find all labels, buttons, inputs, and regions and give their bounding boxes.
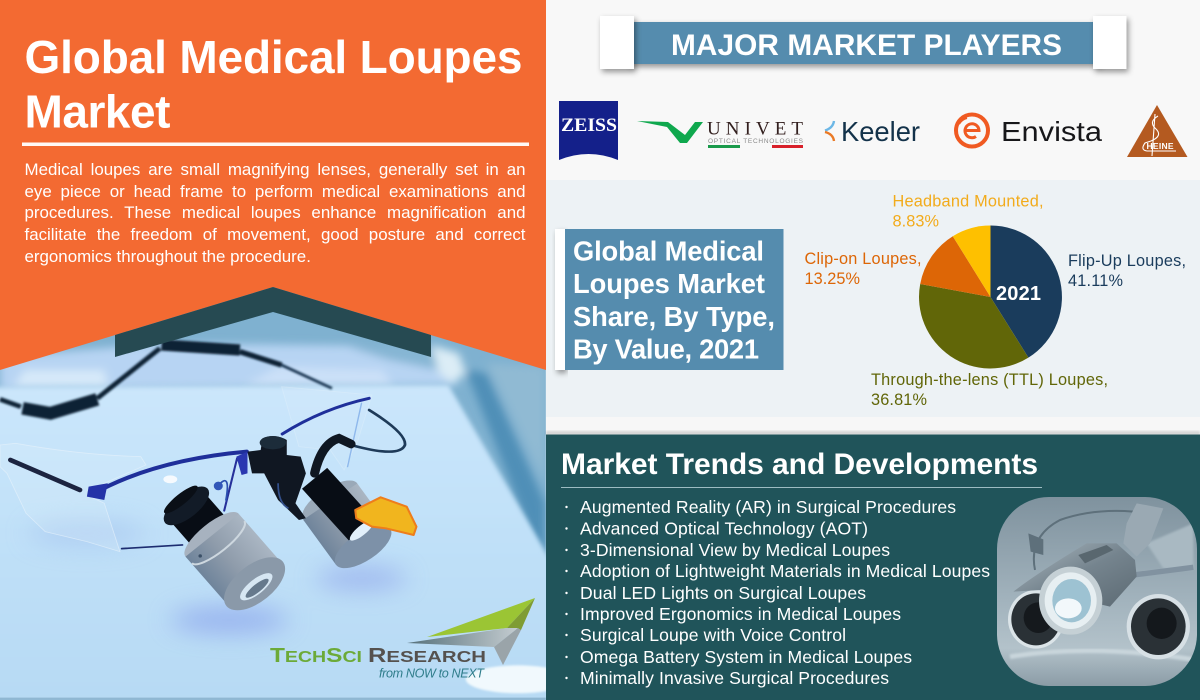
label: through-the-lens loupes: Through-the-lens (TTL) Loupes, xyxy=(871,371,1108,389)
list of trends: Advanced Optical Technology (AOT) xyxy=(580,518,868,538)
logo: Heine xyxy=(1127,105,1188,157)
heading: market trends and developments: Market Trends and Developments xyxy=(561,448,1038,481)
logo: Zeiss: ZEISS xyxy=(561,115,617,136)
logo: Envista: Envista xyxy=(1001,116,1102,147)
chevron: dark teal roof xyxy=(115,287,431,357)
title underline xyxy=(22,142,529,146)
logo: Envista xyxy=(956,114,1102,147)
logo: TechSci Research: from NOW to NEXT xyxy=(379,666,485,680)
panel: market share title block xyxy=(555,229,784,370)
logo: Univet: OPTICAL TECHNOLOGIES xyxy=(708,138,804,145)
label: headband mounted: Headband Mounted, xyxy=(892,192,1044,210)
title: Global Medical Loupes xyxy=(24,31,522,83)
blue frame xyxy=(10,398,405,549)
left loupe xyxy=(164,486,286,610)
title: Market xyxy=(24,86,170,138)
panel: major market players background xyxy=(546,0,1200,178)
clear lenses xyxy=(0,387,372,552)
orange filter xyxy=(355,497,416,535)
text block: market description: ergonomics throughout the procedure. xyxy=(24,247,311,266)
left eyepiece xyxy=(1008,590,1064,649)
bridge mount xyxy=(247,436,306,520)
logo: Zeiss xyxy=(559,101,618,160)
heading underline xyxy=(561,487,1042,488)
list of trends: 3-Dimensional View by Medical Loupes xyxy=(580,540,890,560)
panel: market share title block: Global Medical xyxy=(573,236,764,266)
label: flip-up loupes: Flip-Up Loupes, xyxy=(1068,252,1186,270)
label: through-the-lens loupes: 36.81% xyxy=(871,391,927,409)
text block: market description: facilitate the freedom of movement, good posture and correct xyxy=(24,225,526,244)
logo: Keeler: Keeler xyxy=(841,116,920,147)
label: flip-up loupes: 41.11% xyxy=(1068,272,1123,290)
list of trends xyxy=(565,497,990,688)
list of trends: Improved Ergonomics in Medical Loupes xyxy=(580,604,901,624)
photo: medical loupes on a tray xyxy=(0,270,570,700)
panel: orange header shape xyxy=(0,0,546,370)
text block: market description: Medical loupes are small magnifying lenses, generally set in an xyxy=(24,160,526,179)
panel: market share title block: Share, By Type, xyxy=(573,301,775,332)
text block: market description xyxy=(24,160,526,266)
logo: Univet xyxy=(637,118,804,148)
pie chart: market share by type xyxy=(919,225,1062,368)
panel: market share background xyxy=(546,180,1200,417)
label: clip-on loupes: Clip-on Loupes, xyxy=(804,250,922,268)
list of trends: Minimally Invasive Surgical Procedures xyxy=(580,668,889,688)
label: headband mounted: 8.83% xyxy=(892,212,939,230)
list of trends: Surgical Loupe with Voice Control xyxy=(580,625,846,645)
panel: market trends xyxy=(546,431,1200,700)
logo: TechSci Research xyxy=(270,598,535,680)
logo: Univet: UNIVET xyxy=(707,118,803,140)
logo: Heine: HEINE xyxy=(1146,141,1174,151)
right eyepiece xyxy=(1127,594,1190,659)
logo: TechSci Research: RESEARCH xyxy=(368,645,486,667)
list of trends: Augmented Reality (AR) in Surgical Procedures xyxy=(580,497,956,517)
panel: market share title block: Loupes Market xyxy=(573,268,765,299)
temple arm xyxy=(0,345,332,413)
text block: market description: eye piece or head frame to perform medical examinations and xyxy=(24,182,526,201)
label: clip-on loupes: 13.25% xyxy=(804,270,860,288)
list of trends: Omega Battery System in Medical Loupes xyxy=(580,647,912,667)
panel: market share title block: By Value, 2021 xyxy=(573,334,759,364)
banner: major market players: MAJOR MARKET PLAYERS xyxy=(671,29,1062,62)
pie chart: market share by type: 2021 xyxy=(996,283,1041,305)
list of trends: Dual LED Lights on Surgical Loupes xyxy=(580,583,866,603)
photo: loupes with headlight xyxy=(997,497,1197,686)
right loupe xyxy=(302,480,392,568)
panel: gap strip xyxy=(546,417,1200,434)
text block: market description: procedures. These medical loupes enhance magnification and xyxy=(24,203,526,222)
logo: TechSci Research: TECH SCI xyxy=(270,645,362,667)
list of trends: Adoption of Lightweight Materials in Medical Loupes xyxy=(580,561,990,581)
banner: major market players xyxy=(600,16,1126,69)
